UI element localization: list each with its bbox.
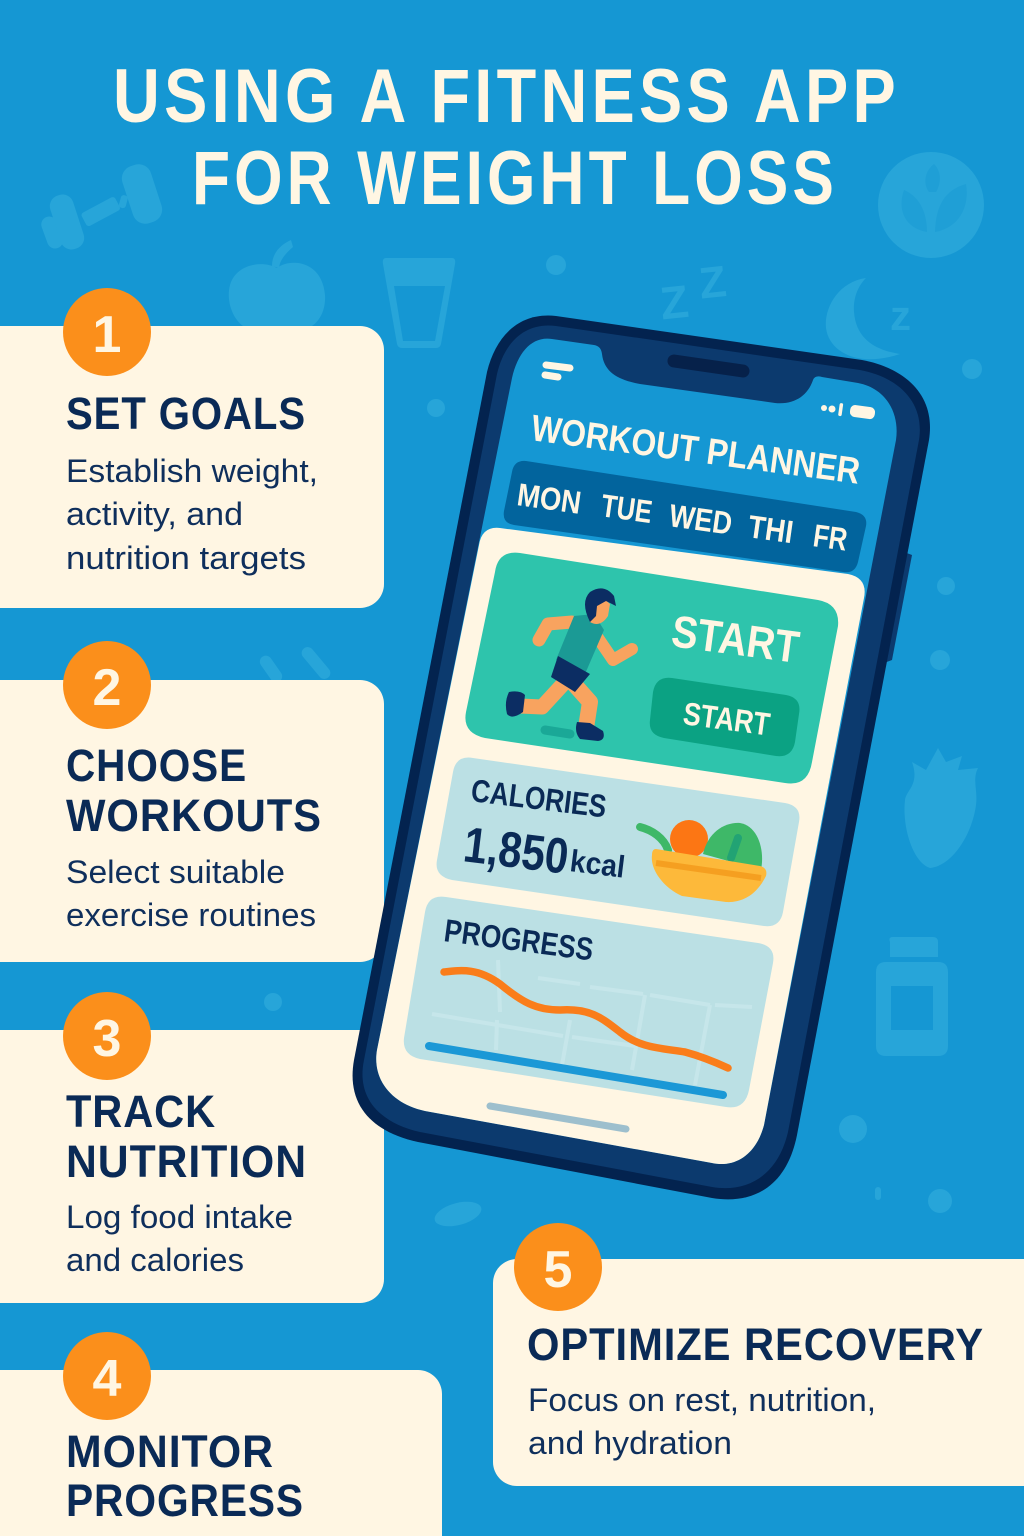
day selector bbox=[504, 461, 866, 572]
icon: sleep letters zz bbox=[658, 257, 729, 329]
panel: step 2 choose workouts: CHOOSE bbox=[66, 740, 247, 791]
icon: sleep letters zz: Z bbox=[658, 275, 691, 329]
icon: moon and z bbox=[826, 278, 911, 359]
panel: step 2 choose workouts: 2 bbox=[93, 659, 121, 717]
panel: step 3 track nutrition: Log food intake bbox=[66, 1199, 293, 1235]
icon: supplement jar bbox=[876, 937, 948, 1056]
title bbox=[113, 54, 900, 221]
icon: sleep letters zz: Z bbox=[697, 257, 729, 309]
panel: step 1 set goals: 1 bbox=[93, 306, 121, 364]
panel: step 3 track nutrition: and calories bbox=[66, 1242, 244, 1278]
day selector: FR bbox=[811, 517, 850, 558]
calories card: kcal bbox=[568, 843, 627, 885]
panel: step 2 choose workouts: Select suitable bbox=[66, 854, 285, 890]
title: USING A FITNESS APP bbox=[113, 54, 900, 139]
panel: step 4 monitor progress: 4 bbox=[93, 1350, 122, 1408]
menu icon bbox=[545, 365, 570, 377]
start button bbox=[650, 678, 799, 756]
panel: step 4 monitor progress: PROGRESS bbox=[66, 1475, 304, 1526]
chart grid bbox=[432, 960, 752, 1085]
status icons bbox=[821, 403, 876, 420]
panel: step 3 track nutrition: NUTRITION bbox=[66, 1136, 307, 1187]
panel: step 3 track nutrition: TRACK bbox=[66, 1086, 216, 1137]
panel: step 5 optimize recovery: OPTIMIZE RECOVERY bbox=[527, 1319, 984, 1370]
home indicator bbox=[490, 1106, 626, 1129]
panel: step 5 optimize recovery: 5 bbox=[544, 1241, 572, 1299]
icon: moon and z: z bbox=[890, 292, 911, 339]
progress line bbox=[444, 971, 728, 1068]
panel: step 3 track nutrition: 3 bbox=[93, 1010, 121, 1068]
panel: step 1 set goals bbox=[0, 288, 384, 608]
day selector: TUE bbox=[599, 487, 655, 530]
panel: step 1 set goals: nutrition targets bbox=[66, 540, 306, 576]
panel: step 1 set goals: SET GOALS bbox=[66, 388, 306, 439]
progress card: PROGRESS bbox=[442, 912, 596, 968]
side button bbox=[884, 552, 912, 663]
panel: step 5 optimize recovery bbox=[493, 1223, 1024, 1486]
cream content panel bbox=[376, 528, 865, 1164]
app header: workout planner: WORKOUT PLANNER bbox=[529, 407, 862, 492]
panel: step 4 monitor progress bbox=[0, 1332, 442, 1536]
icon: food bowl bbox=[640, 820, 766, 902]
phone mockup bbox=[353, 316, 930, 1199]
day selector: THI bbox=[746, 508, 796, 550]
panel: step 2 choose workouts: exercise routines bbox=[66, 897, 316, 933]
title: FOR WEIGHT LOSS bbox=[192, 136, 838, 221]
start button: START bbox=[681, 695, 772, 742]
background decorative health icons bbox=[39, 152, 984, 1231]
icon: strawberry bbox=[904, 748, 978, 868]
panel: step 1 set goals: Establish weight, bbox=[66, 453, 318, 489]
notch speaker bbox=[674, 361, 743, 371]
panel: step 5 optimize recovery: Focus on rest, nutrition, bbox=[528, 1382, 876, 1418]
panel: step 2 choose workouts: WORKOUTS bbox=[66, 790, 322, 841]
icon: glass of water bbox=[383, 258, 455, 348]
icon: apple bbox=[229, 240, 325, 326]
calories card: CALORIES bbox=[469, 772, 609, 825]
panel: step 3 track nutrition bbox=[0, 992, 384, 1303]
calories card: 1,850 bbox=[461, 816, 572, 885]
phone screen bbox=[376, 339, 897, 1164]
icon: leaf circle bbox=[878, 152, 984, 258]
panel: step 4 monitor progress: MONITOR bbox=[66, 1426, 274, 1477]
workout card: START bbox=[669, 605, 802, 673]
day selector: MON bbox=[515, 476, 583, 521]
panel: step 1 set goals: activity, and bbox=[66, 496, 243, 532]
runner figure bbox=[506, 588, 632, 741]
phone body bbox=[353, 316, 930, 1199]
progress card bbox=[404, 897, 773, 1107]
icon: dumbbell bbox=[39, 161, 166, 252]
decorative dots bbox=[257, 255, 982, 1231]
day selector: WED bbox=[667, 497, 734, 542]
baseline bar bbox=[429, 1046, 723, 1095]
panel: step 5 optimize recovery: and hydration bbox=[528, 1425, 732, 1461]
panel: step 2 choose workouts bbox=[0, 641, 384, 962]
workout card bbox=[465, 553, 838, 784]
calories card bbox=[437, 758, 799, 926]
